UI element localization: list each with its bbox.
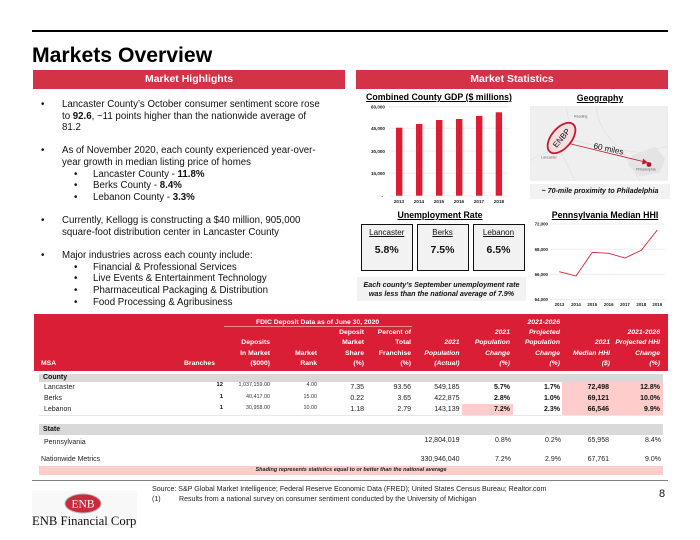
heading: market statistics: Market Statistics <box>470 73 554 85</box>
table: FDIC deposit and demographic data: 1,037,159.00 <box>239 382 270 388</box>
line chart: Pennsylvania median HHI: 64,000 <box>535 297 549 302</box>
bar chart: combined county GDP: 2018 <box>494 199 505 204</box>
table: FDIC deposit and demographic data: Lebanon <box>44 406 71 413</box>
table: FDIC deposit and demographic data: (%) <box>499 360 510 367</box>
table: FDIC deposit and demographic data: In Market <box>240 350 270 357</box>
footnotes: sources: (1) <box>152 496 161 503</box>
line chart: Pennsylvania median HHI: 2015 <box>587 302 598 307</box>
table: FDIC deposit and demographic data: Total <box>395 339 411 346</box>
bar chart: combined county GDP: 2015 <box>434 199 445 204</box>
table: FDIC deposit and demographic data: 2.3% <box>544 406 560 413</box>
callout: unemployment note <box>357 277 526 301</box>
table: FDIC deposit and demographic data: 1.18 <box>350 406 364 413</box>
table: FDIC deposit and demographic data: ($) <box>602 360 610 367</box>
line chart: Pennsylvania median HHI: 2017 <box>620 302 630 307</box>
bar chart: combined county GDP: 2017 <box>474 199 485 204</box>
table: FDIC deposit and demographic data: 1.7% <box>544 384 560 391</box>
text block: market highlights bullets: Lancaster County’s October consumer sentiment score rose <box>62 99 320 110</box>
table: FDIC deposit and demographic data: (%) <box>400 360 411 367</box>
map: distance to Philadelphia <box>530 106 668 181</box>
bar chart: combined county GDP: 60,000 <box>371 104 385 110</box>
text block: market highlights bullets: • <box>41 250 44 261</box>
table: FDIC deposit and demographic data: 2021 <box>595 339 610 346</box>
stat box: Lancaster: Lancaster <box>369 228 404 237</box>
table: FDIC deposit and demographic data: Projected <box>529 329 560 336</box>
table: FDIC deposit and demographic data: Population <box>475 339 510 346</box>
stat box: Berks: Berks <box>432 228 453 237</box>
table: FDIC deposit and demographic data: Deposits <box>241 339 270 346</box>
text block: market highlights bullets: • <box>74 180 77 191</box>
text block: market highlights bullets: Lancaster County - 11.8% <box>93 168 204 180</box>
table: FDIC deposit and demographic data: 8.4% <box>645 437 661 444</box>
table: FDIC deposit and demographic data: 12 <box>217 382 223 388</box>
text block: market highlights bullets: Food Processing & Agribusiness <box>93 297 232 308</box>
table: FDIC deposit and demographic data: (%) <box>649 360 660 367</box>
table: FDIC deposit and demographic data: 72,498 <box>588 384 609 391</box>
callout: unemployment note: was less than the national average of 7.9% <box>369 289 514 298</box>
bar chart: combined county GDP <box>371 104 509 204</box>
table: FDIC deposit and demographic data: 65,958 <box>588 437 609 444</box>
table: FDIC deposit and demographic data: (Actual) <box>434 360 460 367</box>
table: FDIC deposit and demographic data: 15.00 <box>304 394 317 400</box>
table: FDIC deposit and demographic data: Market <box>295 350 317 357</box>
bar chart: combined county GDP: 2016 <box>454 199 465 204</box>
table: FDIC deposit and demographic data: 10.0% <box>640 395 660 402</box>
text block: market highlights bullets: • <box>74 285 77 296</box>
table: FDIC deposit and demographic data: Franchise <box>379 350 411 357</box>
table: FDIC deposit and demographic data: 67,761 <box>588 456 609 462</box>
heading: Pennsylvania median HHI: Pennsylvania Median HHI <box>552 210 658 220</box>
table: FDIC deposit and demographic data: (%) <box>549 360 560 367</box>
line chart: Pennsylvania median HHI: 2013 <box>555 302 565 307</box>
table: FDIC deposit and demographic data: 66,546 <box>588 406 609 413</box>
heading: market statistics <box>356 70 668 89</box>
text block: market highlights bullets: • <box>41 99 44 110</box>
map: distance to Philadelphia: Philadelphia <box>636 167 656 171</box>
footnotes: sources: Source: S&P Global Market Intelligence; Federal Reserve Economic Data (FRED); United States Census Bureau; Realtor.com <box>152 486 546 493</box>
line chart: Pennsylvania median HHI: 68,000 <box>535 247 549 252</box>
table: FDIC deposit and demographic data: 3.65 <box>397 395 411 402</box>
table: FDIC deposit and demographic data: 40,417.00 <box>246 394 270 400</box>
table: FDIC deposit and demographic data: County <box>43 374 67 381</box>
table: FDIC deposit and demographic data: 12.8% <box>640 384 660 391</box>
heading: unemployment rate: Unemployment Rate <box>397 210 483 220</box>
table: FDIC deposit and demographic data: 1.0% <box>544 395 560 402</box>
line chart: Pennsylvania median HHI: 72,000 <box>535 222 549 227</box>
text block: market highlights bullets: • <box>74 168 77 180</box>
text block: market highlights bullets: to 92.6, ~11 points higher than the nationwide average of <box>62 110 306 122</box>
table: FDIC deposit and demographic data: Change <box>635 350 660 357</box>
table: FDIC deposit and demographic data: 2021-2026 <box>627 329 660 336</box>
text block: market highlights bullets: Pharmaceutical Packaging & Distribution <box>93 285 268 296</box>
table: FDIC deposit and demographic data: FDIC Deposit Data as of June 30, 2020 <box>256 319 379 326</box>
text block: market highlights bullets: • <box>41 215 44 226</box>
logo: ENB Financial Corp: ENB <box>72 498 95 510</box>
line chart: Pennsylvania median HHI: 2018 <box>636 302 647 307</box>
table: FDIC deposit and demographic data: 2021 <box>444 339 460 346</box>
table: FDIC deposit and demographic data: 30,958.00 <box>246 405 270 411</box>
table: FDIC deposit and demographic data: 69,121 <box>588 395 609 402</box>
text block: market highlights bullets: • <box>74 262 77 272</box>
bar chart: combined county GDP: 45,000 <box>371 126 385 131</box>
bar chart: combined county GDP: - <box>381 194 383 198</box>
table: FDIC deposit and demographic data: 549,185 <box>434 384 460 391</box>
table: FDIC deposit and demographic data: 1 <box>220 394 223 400</box>
table: FDIC deposit and demographic data: Pennsylvania <box>44 438 86 446</box>
table: FDIC deposit and demographic data: State <box>43 426 60 432</box>
callout: proximity to Philadelphia <box>530 184 670 199</box>
table: FDIC deposit and demographic data: 7.2% <box>494 406 510 413</box>
heading: combined county GDP: Combined County GDP ($ millions) <box>366 92 512 102</box>
table: FDIC deposit and demographic data: 0.2% <box>545 437 561 444</box>
table: FDIC deposit and demographic data: 5.7% <box>494 384 510 391</box>
text block: market highlights bullets <box>41 99 320 308</box>
table: FDIC deposit and demographic data: 7.35 <box>350 384 364 391</box>
table: FDIC deposit and demographic data: Nationwide Metrics <box>41 456 100 462</box>
heading: market highlights <box>33 70 345 89</box>
logo: ENB Financial Corp: ENB Financial Corp <box>32 514 136 528</box>
text block: market highlights bullets: Financial & Professional Services <box>93 262 237 272</box>
text block: market highlights bullets: Lebanon County - 3.3% <box>93 192 195 203</box>
line chart: Pennsylvania median HHI: 2014 <box>571 302 581 307</box>
line chart: Pennsylvania median HHI <box>534 222 665 307</box>
table: FDIC deposit and demographic data: 2.8% <box>494 395 510 402</box>
table: FDIC deposit and demographic data: 1 <box>220 405 223 411</box>
text block: market highlights bullets: 81.2 <box>62 122 81 133</box>
table: FDIC deposit and demographic data: Berks <box>44 395 62 402</box>
table: FDIC deposit and demographic data: Change <box>535 350 560 357</box>
table: FDIC deposit and demographic data: 9.9% <box>644 406 660 413</box>
map: distance to Philadelphia: Reading <box>574 114 587 118</box>
text block: market highlights bullets: • <box>74 192 77 203</box>
text block: market highlights bullets: • <box>41 145 44 156</box>
page number: 8 <box>659 488 665 500</box>
logo: ENB Financial Corp <box>32 491 137 528</box>
table: FDIC deposit and demographic data: 2021 <box>495 329 510 336</box>
table: FDIC deposit and demographic data: Rank <box>300 360 317 367</box>
text block: market highlights bullets: Currently, Kellogg is constructing a $40 million, 905,000 <box>62 215 300 226</box>
table: FDIC deposit and demographic data: 2.79 <box>397 406 411 413</box>
table: FDIC deposit and demographic data: 143,139 <box>434 406 460 413</box>
table: FDIC deposit and demographic data: 10.00 <box>304 405 317 411</box>
table: FDIC deposit and demographic data <box>34 314 668 475</box>
map: distance to Philadelphia: 60 miles <box>593 141 624 156</box>
stat box: Berks: 7.5% <box>431 244 454 256</box>
table: FDIC deposit and demographic data: Lancaster <box>44 384 75 391</box>
footnotes: sources: Results from a national survey on consumer sentiment conducted by the University of Michigan <box>179 496 476 503</box>
table: FDIC deposit and demographic data: Projected HHI <box>615 339 660 346</box>
table: FDIC deposit and demographic data: 12,804,019 <box>424 437 460 444</box>
bar chart: combined county GDP: 30,000 <box>371 149 385 154</box>
text block: market highlights bullets: As of November 2020, each county experienced year-over- <box>62 145 316 156</box>
table: FDIC deposit and demographic data: Population <box>525 339 560 346</box>
table: FDIC deposit and demographic data: 4.00 <box>306 382 317 388</box>
text block: market highlights bullets: Berks County - 8.4% <box>93 180 182 191</box>
text block: market highlights bullets: Major industries across each county include: <box>62 250 253 261</box>
table: FDIC deposit and demographic data: 0.22 <box>350 395 364 402</box>
table: FDIC deposit and demographic data: (%) <box>353 360 364 367</box>
table: FDIC deposit and demographic data: 9.0% <box>645 456 661 462</box>
line chart: Pennsylvania median HHI: 66,000 <box>535 272 549 277</box>
stat box: Lebanon <box>472 224 524 271</box>
table: FDIC deposit and demographic data: ($000) <box>250 360 270 367</box>
table: FDIC deposit and demographic data: 330,946,040 <box>421 456 460 462</box>
table: FDIC deposit and demographic data: 93.56 <box>393 384 411 391</box>
table: FDIC deposit and demographic data: 7.2% <box>495 456 511 462</box>
heading: market highlights: Market Highlights <box>145 73 233 85</box>
table: FDIC deposit and demographic data: Change <box>485 350 510 357</box>
bar chart: combined county GDP: 2014 <box>414 199 425 204</box>
text block: market highlights bullets: • <box>74 273 77 284</box>
table: FDIC deposit and demographic data: Branches <box>184 360 215 367</box>
table: FDIC deposit and demographic data: 0.8% <box>495 437 511 444</box>
table: FDIC deposit and demographic data: Deposit <box>339 329 364 336</box>
title: Markets Overview <box>32 44 212 67</box>
heading: geography: Geography <box>577 93 623 103</box>
stat box: Lancaster: 5.8% <box>375 244 399 256</box>
bar chart: combined county GDP: 2013 <box>394 199 405 204</box>
text block: market highlights bullets: • <box>74 297 77 308</box>
line chart: Pennsylvania median HHI: 2019 <box>652 302 663 307</box>
table: FDIC deposit and demographic data: Market <box>342 339 364 346</box>
stat box: Lebanon: 6.5% <box>487 244 510 256</box>
stat box: Lancaster <box>360 224 413 271</box>
table: FDIC deposit and demographic data: 422,875 <box>434 395 460 402</box>
stat box: Lebanon: Lebanon <box>483 228 514 237</box>
text block: market highlights bullets: year growth in median listing price of homes <box>62 157 251 168</box>
table: FDIC deposit and demographic data: Shading represents statistics equal to or better than the national average <box>255 467 447 473</box>
stat box: Berks <box>416 224 468 271</box>
table: FDIC deposit and demographic data: Share <box>345 350 364 357</box>
text block: market highlights bullets: square-foot distribution center in Lancaster County <box>62 226 279 238</box>
map: distance to Philadelphia: ENBP <box>551 126 572 149</box>
table: FDIC deposit and demographic data: Percent of <box>378 329 411 336</box>
table: FDIC deposit and demographic data: Median HHI <box>573 350 610 357</box>
bar chart: combined county GDP: 15,000 <box>371 171 385 176</box>
callout: proximity to Philadelphia: ~ 70-mile proximity to Philadelphia <box>542 187 658 195</box>
map: distance to Philadelphia: Lancaster <box>541 155 558 159</box>
table: FDIC deposit and demographic data: MSA <box>41 360 56 367</box>
callout: unemployment note: Each county’s September unemployment rate <box>363 280 520 288</box>
table: FDIC deposit and demographic data: 2.9% <box>545 456 561 462</box>
footnotes: sources <box>152 486 546 503</box>
text block: market highlights bullets: Live Events & Entertainment Technology <box>93 273 267 284</box>
table: FDIC deposit and demographic data: Population <box>424 350 460 357</box>
table: FDIC deposit and demographic data: 2021-2026 <box>527 319 560 326</box>
line chart: Pennsylvania median HHI: 2016 <box>604 302 614 307</box>
